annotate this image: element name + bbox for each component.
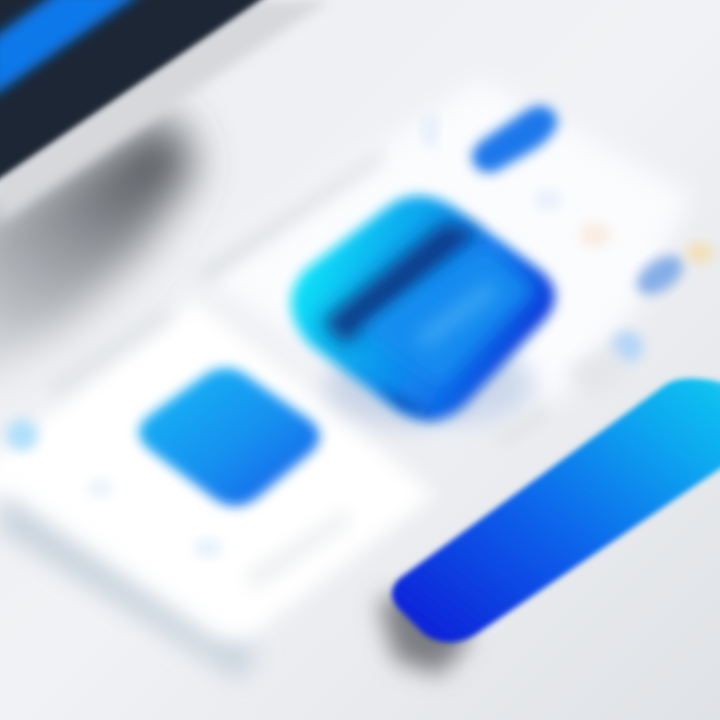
small grey widget <box>565 345 630 400</box>
monitor screen <box>0 0 275 185</box>
monitor frame <box>0 0 330 222</box>
icon: blue chip <box>630 248 690 302</box>
icon: pale dot lower card <box>194 539 222 557</box>
icon: orange dot <box>579 223 611 247</box>
tile body <box>291 196 555 421</box>
icon: light blue dot right <box>611 331 643 363</box>
panel: upper right card <box>195 80 690 440</box>
icon: pale blue dot <box>534 190 562 210</box>
icon: light blue dot left <box>6 419 38 451</box>
icon: pale dot lower card <box>87 479 113 497</box>
text placeholder line <box>195 150 385 285</box>
monitor shadow <box>0 115 195 390</box>
small blue tile <box>139 368 320 506</box>
central blue tile shadow <box>325 340 535 430</box>
tile label <box>415 280 497 350</box>
tile face <box>362 245 535 385</box>
text placeholder line <box>245 510 352 590</box>
card edge shadow <box>0 492 260 680</box>
monitor <box>0 0 330 222</box>
monitor blue stripe <box>0 0 145 98</box>
bottom right blue bar <box>392 378 720 642</box>
central blue tile <box>291 196 555 421</box>
icon: yellow chip <box>686 243 714 263</box>
panel: lower left card <box>0 300 435 650</box>
text placeholder line <box>45 305 172 398</box>
bottom bar shadow <box>378 590 470 675</box>
top blue pill <box>472 106 558 172</box>
tile lower dark band <box>315 338 440 420</box>
pale accent near pill <box>422 112 438 148</box>
grey label under tile <box>495 405 550 450</box>
tile dark band <box>322 222 480 345</box>
